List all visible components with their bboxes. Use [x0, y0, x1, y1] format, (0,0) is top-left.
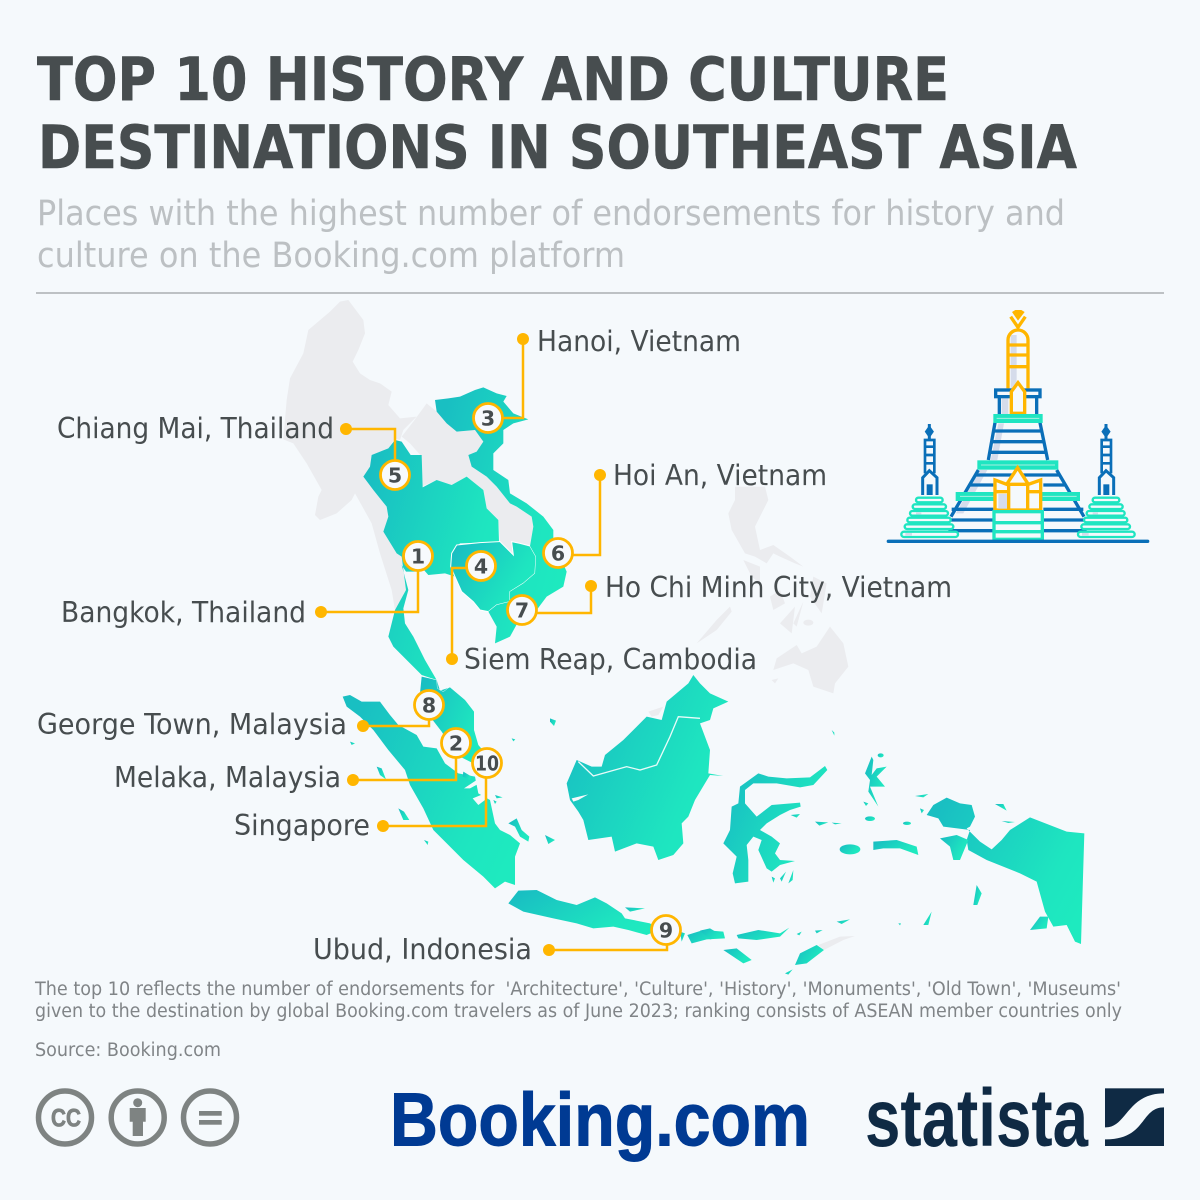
right side tower	[1078, 424, 1135, 537]
Aru, Tanimbar and Lesser Sunda islands	[700, 885, 982, 975]
title: TOP 10 HISTORY AND CULTURE	[37, 45, 949, 115]
Bangka and Belitung	[508, 818, 555, 844]
logo: statista mark	[1105, 1088, 1164, 1146]
marker 2: Melaka	[114, 728, 470, 794]
marker 4: Siem Reap	[446, 552, 757, 676]
ground line	[888, 536, 1148, 546]
central spire	[1008, 310, 1028, 388]
title	[37, 45, 1077, 183]
central teal base	[994, 512, 1042, 539]
Kalimantan and Malaysian Borneo	[567, 675, 728, 860]
Vietnam	[435, 387, 567, 643]
Laos (grey)	[402, 403, 533, 555]
marker 10: Singapore: 10	[475, 752, 499, 776]
marker 2: Melaka: 2	[449, 732, 463, 756]
marker 3: Hanoi: 3	[481, 406, 495, 430]
footnote: given to the destination by global Booking.com travelers as of June 2023; ranking consists of ASEAN member countries only	[35, 1001, 1122, 1022]
Sumatra coastal inlets	[445, 760, 485, 805]
left side tower	[901, 424, 958, 537]
marker 10: Singapore	[234, 748, 502, 842]
marker 6: Hoi An	[544, 459, 827, 568]
marker 5: Chiang Mai: Chiang Mai, Thailand	[57, 412, 334, 445]
marker 8: George Town: 8	[422, 694, 436, 718]
subtitle	[37, 194, 1065, 276]
marker 8: George Town: George Town, Malaysia	[37, 708, 347, 741]
upper orange arch	[1011, 383, 1025, 413]
marker 9: Ubud: 9	[659, 918, 673, 942]
marker 9: Ubud: Ubud, Indonesia	[313, 933, 532, 966]
footnote: The top 10 reflects the number of endorsements for 'Architecture', 'Culture', 'History', 'Monuments', 'Old Town', 'Museums'	[34, 979, 1121, 1000]
shading	[956, 335, 1017, 538]
marker 5: Chiang Mai	[57, 412, 410, 490]
Peninsular Malaysia	[420, 677, 488, 763]
marker 9: Ubud	[313, 916, 680, 966]
small islands of Sulawesi and Maluku	[772, 730, 1015, 883]
Cambodia	[451, 542, 536, 612]
logo: Booking.com: Booking.com	[390, 1078, 810, 1162]
central shrine	[995, 468, 1041, 510]
marker 3: Hanoi: Hanoi, Vietnam	[537, 325, 741, 358]
mainland countries	[283, 300, 567, 680]
marker 5: Chiang Mai: 5	[388, 464, 402, 488]
footnote	[34, 979, 1122, 1061]
icon: Creative Commons	[38, 1091, 92, 1144]
Java	[508, 890, 658, 935]
icon: attribution	[111, 1091, 164, 1144]
subtitle: culture on the Booking.com platform	[37, 236, 625, 276]
Malaysia and western Indonesia	[343, 675, 728, 943]
logo: statista wordmark: statista	[865, 1073, 1089, 1164]
upper blue tier	[948, 390, 1087, 531]
title: DESTINATIONS IN SOUTHEAST ASIA	[38, 113, 1077, 183]
icon: Wat Arun temple	[888, 310, 1148, 541]
marker 2: Melaka: Melaka, Malaysia	[114, 761, 341, 794]
Myanmar (grey)	[283, 300, 417, 610]
marker 4: Siem Reap: 4	[474, 554, 488, 578]
marker 3: Hanoi	[474, 325, 741, 432]
footnote: Source: Booking.com	[35, 1040, 221, 1061]
eastern Indonesia	[700, 730, 1084, 975]
Timor-Leste (grey)	[818, 936, 855, 950]
teal bands	[956, 414, 1080, 501]
marker 6: Hoi An: Hoi An, Vietnam	[613, 459, 827, 492]
icon: Creative Commons: CC	[51, 1104, 81, 1132]
Sumatra	[343, 695, 520, 888]
Sulawesi	[723, 766, 827, 883]
small islands of Sumatra	[350, 718, 556, 845]
marker 1: Bangkok	[61, 542, 432, 629]
Brunei	[648, 707, 663, 717]
marker 7: Ho Chi Minh City	[508, 571, 952, 624]
marker 1: Bangkok: Bangkok, Thailand	[61, 596, 306, 629]
marker 10: Singapore: Singapore	[234, 809, 370, 842]
subtitle: Places with the highest number of endorsements for history and	[37, 194, 1065, 234]
marker 4: Siem Reap: Siem Reap, Cambodia	[464, 643, 757, 676]
Philippines (grey)	[697, 487, 848, 693]
Madura, Bali, Lombok	[625, 907, 725, 943]
marker 1: Bangkok: 1	[411, 544, 425, 568]
New Guinea: Papua	[927, 798, 1084, 944]
marker 7: Ho Chi Minh City: Ho Chi Minh City, Vietnam	[605, 571, 952, 604]
icon: no derivatives	[184, 1091, 236, 1144]
map: Southeast Asia	[283, 300, 1084, 975]
Thailand	[363, 440, 499, 680]
marker 8: George Town	[37, 690, 444, 741]
marker 6: Hoi An: 6	[551, 542, 565, 566]
marker 7: Ho Chi Minh City: 7	[515, 598, 529, 622]
